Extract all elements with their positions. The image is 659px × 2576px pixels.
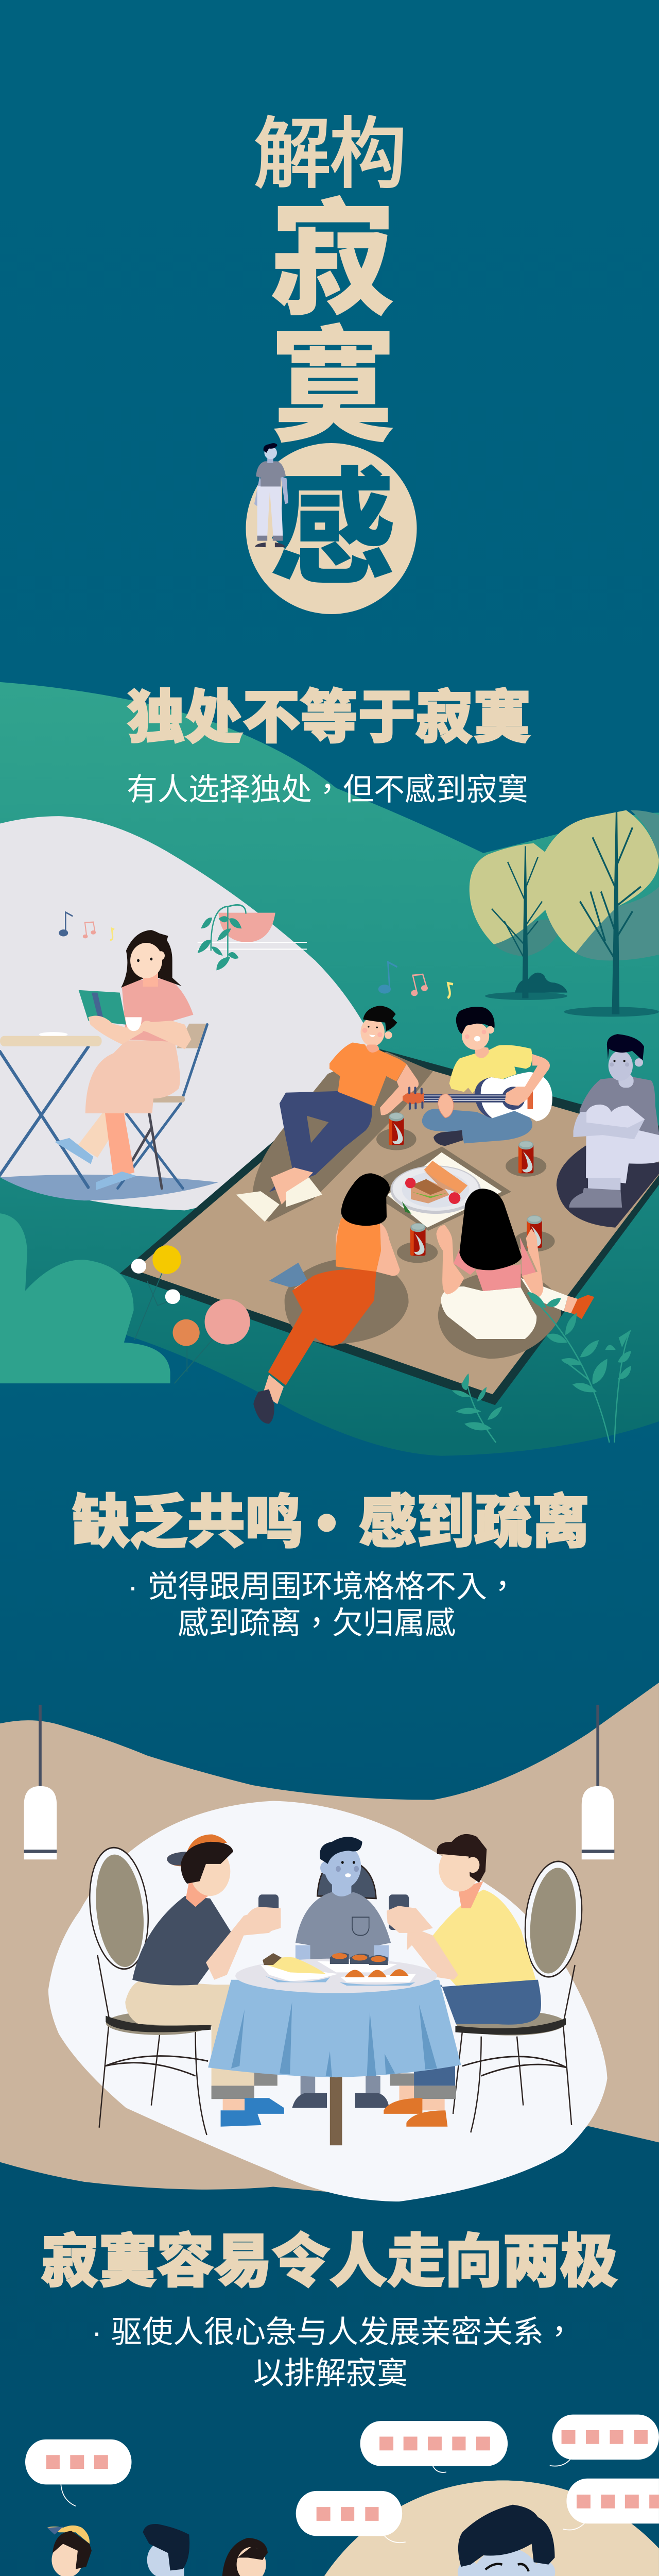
picnic people group	[330, 1006, 659, 1339]
white blob	[48, 1801, 608, 2201]
heading: 缺乏共鸣 感到疏离: 缺乏共鸣	[72, 1490, 303, 1554]
heading: 独处不等于寂寞: 独处不等于寂寞	[127, 685, 531, 750]
lying woman upper body	[336, 1173, 400, 1276]
chair right	[453, 1857, 588, 2132]
text: 驱使人很心急: ·	[92, 2315, 102, 2349]
lying woman legs	[253, 1263, 376, 1424]
section: dining scene	[0, 1683, 659, 2201]
picnic mat	[120, 1049, 659, 1405]
text: 以排解寂寞: 以排解寂寞	[253, 2356, 408, 2391]
speech bubble 3	[550, 2415, 659, 2466]
text: 有人选择独处: 有人选择独处，但不感到寂寞	[127, 772, 528, 807]
title line: 寂: 寂	[270, 189, 396, 330]
speech bubble 1	[25, 2439, 132, 2506]
speech bubble 2	[360, 2421, 508, 2472]
boy in green	[0, 2526, 146, 2576]
hanging plant	[198, 905, 307, 971]
right man	[384, 1834, 541, 2127]
heading: 缺乏共鸣 感到疏离: 感到疏离	[359, 1490, 589, 1554]
sandwich plate	[383, 1147, 511, 1231]
title line: 感: 感	[269, 459, 395, 600]
centre man	[292, 1837, 391, 2108]
music notes: picnic	[378, 962, 453, 998]
text: 觉得跟周围环境格格不入: 觉得跟周围环境格格不入，	[147, 1569, 518, 1604]
small standing man	[254, 443, 288, 547]
sitting woman	[436, 1189, 594, 1339]
beige circle with room	[288, 2480, 659, 2576]
tree right	[576, 810, 659, 960]
drink cans	[376, 1112, 555, 1263]
woman behind	[184, 2538, 309, 2576]
ground shadow under woman	[0, 1175, 218, 1200]
section: two extremes scene	[0, 2415, 659, 2576]
garden foreground	[0, 962, 631, 1443]
foreground plant bottom	[452, 1374, 502, 1443]
bush	[0, 1213, 170, 1383]
circle behind 感	[246, 443, 417, 614]
heading: 寂寞容易令人走向两极: 寂寞容易令人走向两极	[41, 2229, 618, 2294]
woman backdrop blob	[0, 816, 404, 1210]
title line: 解构: 解构	[254, 111, 405, 197]
text: 驱使人很心急: 驱使人很心急与人发展亲密关系，	[111, 2315, 575, 2349]
lying man legs and shoes	[236, 1091, 372, 1222]
flowers	[131, 1245, 250, 1383]
tree left	[470, 810, 659, 1016]
beige band	[0, 1683, 659, 2197]
section: title	[246, 111, 417, 614]
text: 觉得跟周围环境格格不入: ·	[128, 1569, 138, 1604]
speech bubble 5	[563, 2479, 659, 2530]
music notes: woman	[59, 912, 114, 940]
title line: 寞: 寞	[270, 316, 396, 457]
grey-toned sitting man	[557, 1034, 659, 1228]
lamp right	[582, 1705, 614, 1859]
green hill	[0, 682, 659, 1456]
section: picnic scene	[0, 682, 659, 1456]
table	[208, 1959, 461, 2145]
reading woman	[55, 930, 193, 1190]
left man with cap	[125, 1834, 284, 2127]
heading: 缺乏共鸣 感到疏离: •	[317, 1490, 337, 1554]
chair left	[83, 1843, 214, 2135]
orange-shirt man	[330, 1006, 419, 1159]
chair	[118, 1024, 209, 1188]
food on the table	[261, 1953, 416, 1986]
guitar-playing man	[403, 1007, 552, 1146]
speech bubble 4	[296, 2491, 406, 2543]
big man with phone	[395, 2505, 621, 2576]
grey man walking	[59, 2524, 269, 2576]
table	[0, 1032, 102, 1187]
lamp left	[24, 1705, 57, 1859]
text: 感到疏离: 感到疏离，欠归属感	[178, 1606, 456, 1640]
foreground plant right	[527, 1292, 631, 1443]
person shadows on mat	[252, 1052, 561, 1359]
